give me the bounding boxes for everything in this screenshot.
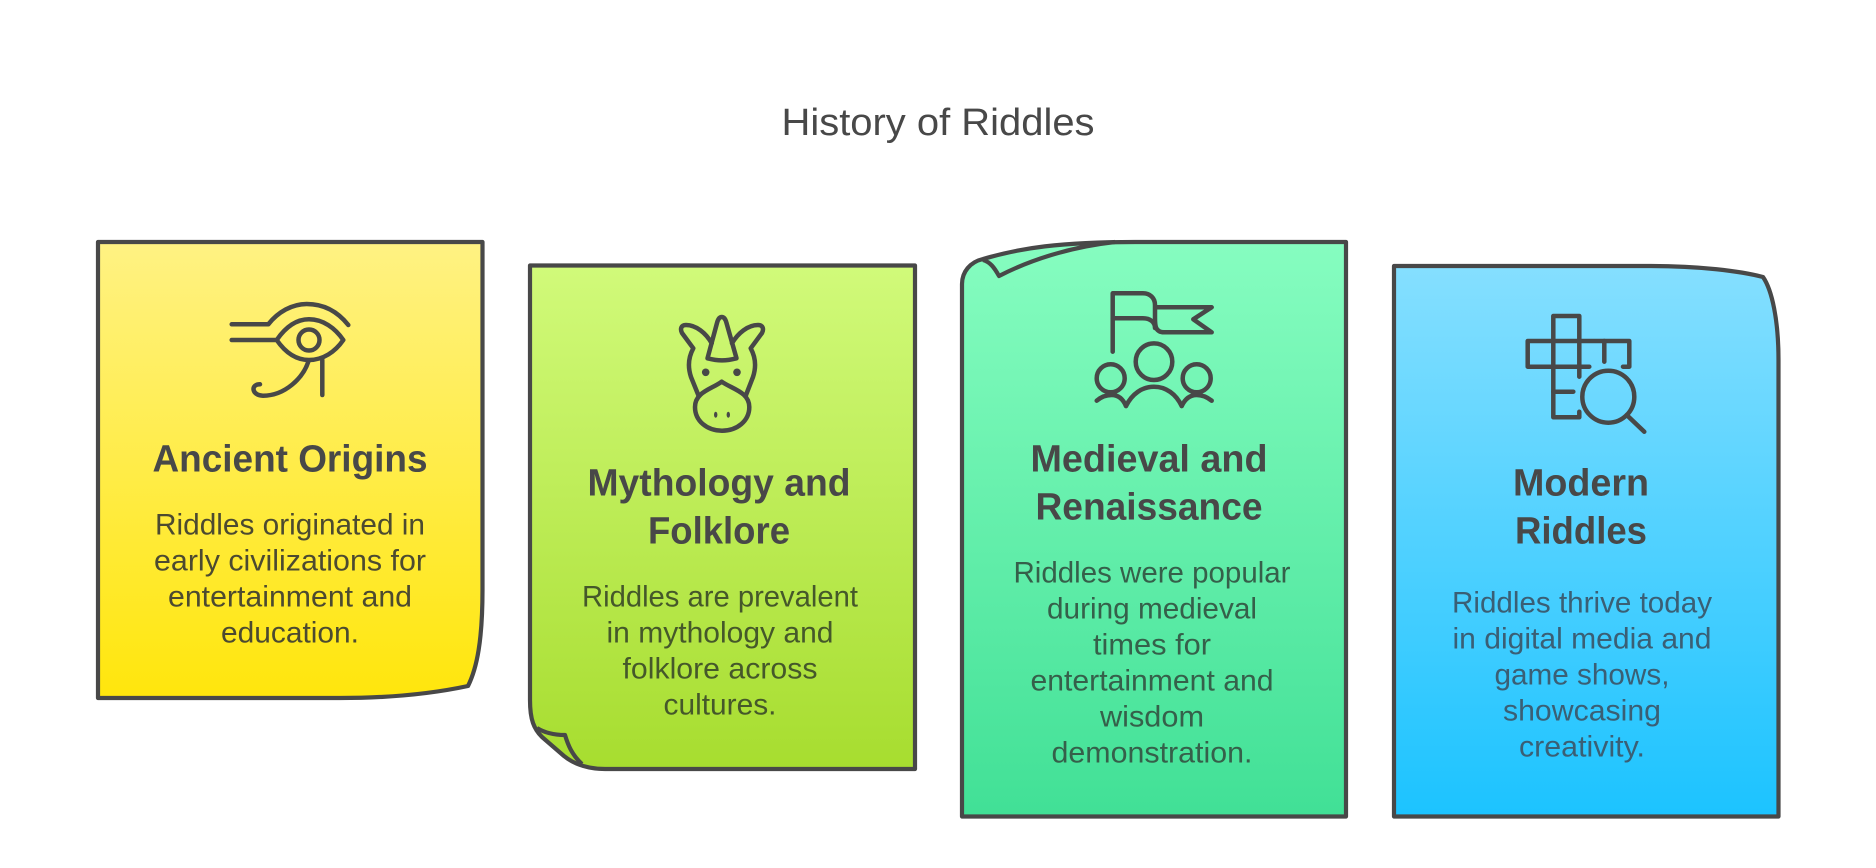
body text: demonstration. bbox=[1052, 736, 1252, 770]
folded corner bbox=[537, 728, 582, 764]
heading: Riddles bbox=[1515, 510, 1647, 552]
icon: crossword and magnifier bbox=[1528, 316, 1644, 432]
icon: flag and people bbox=[1097, 293, 1212, 406]
heading: Folklore bbox=[648, 510, 790, 552]
body text: in mythology and bbox=[606, 616, 834, 650]
curled corner bbox=[983, 242, 1115, 276]
icon: eye of Horus bbox=[232, 304, 348, 396]
body text bbox=[1014, 556, 1291, 770]
heading bbox=[1513, 462, 1649, 552]
title: History of Riddles bbox=[782, 102, 1094, 144]
heading bbox=[588, 462, 850, 552]
body text: education. bbox=[221, 616, 359, 650]
card background: blue note bbox=[1394, 266, 1778, 816]
body text: Riddles are prevalent bbox=[582, 580, 858, 614]
body text bbox=[582, 580, 858, 722]
card background: yellow note bbox=[98, 242, 482, 698]
body text: Riddles originated in bbox=[155, 508, 425, 542]
body text: Riddles thrive today bbox=[1452, 586, 1712, 620]
body text: showcasing bbox=[1503, 694, 1661, 728]
body text: during medieval bbox=[1047, 592, 1257, 626]
body text: entertainment and bbox=[168, 580, 412, 614]
body text: Riddles were popular bbox=[1014, 556, 1291, 590]
heading bbox=[1030, 438, 1268, 528]
heading: Medieval and bbox=[1030, 438, 1268, 480]
body text: wisdom bbox=[1099, 700, 1204, 734]
body text: creativity. bbox=[1519, 730, 1645, 764]
panel: Modern Riddles bbox=[1394, 266, 1778, 816]
heading: Ancient Origins bbox=[152, 438, 428, 480]
body text bbox=[1452, 586, 1712, 764]
card background: lime note with folded corner bbox=[530, 266, 915, 769]
card background: green note with curled top bbox=[962, 242, 1346, 816]
panel: Medieval and Renaissance bbox=[962, 242, 1346, 816]
body text: in digital media and bbox=[1452, 622, 1712, 656]
icon details: eyes and nostrils bbox=[702, 368, 741, 418]
body text: times for bbox=[1093, 628, 1211, 662]
panel: Mythology and Folklore bbox=[530, 266, 915, 769]
heading: Mythology and bbox=[588, 462, 850, 504]
icon: unicorn head bbox=[681, 317, 763, 431]
heading: Modern bbox=[1513, 462, 1649, 504]
heading: Renaissance bbox=[1036, 486, 1262, 528]
body text: game shows, bbox=[1494, 658, 1670, 692]
body text: early civilizations for bbox=[154, 544, 426, 578]
panel: Ancient Origins bbox=[98, 242, 482, 698]
body text bbox=[154, 508, 426, 650]
body text: entertainment and bbox=[1030, 664, 1274, 698]
body text: cultures. bbox=[664, 688, 776, 722]
body text: folklore across bbox=[622, 652, 818, 686]
